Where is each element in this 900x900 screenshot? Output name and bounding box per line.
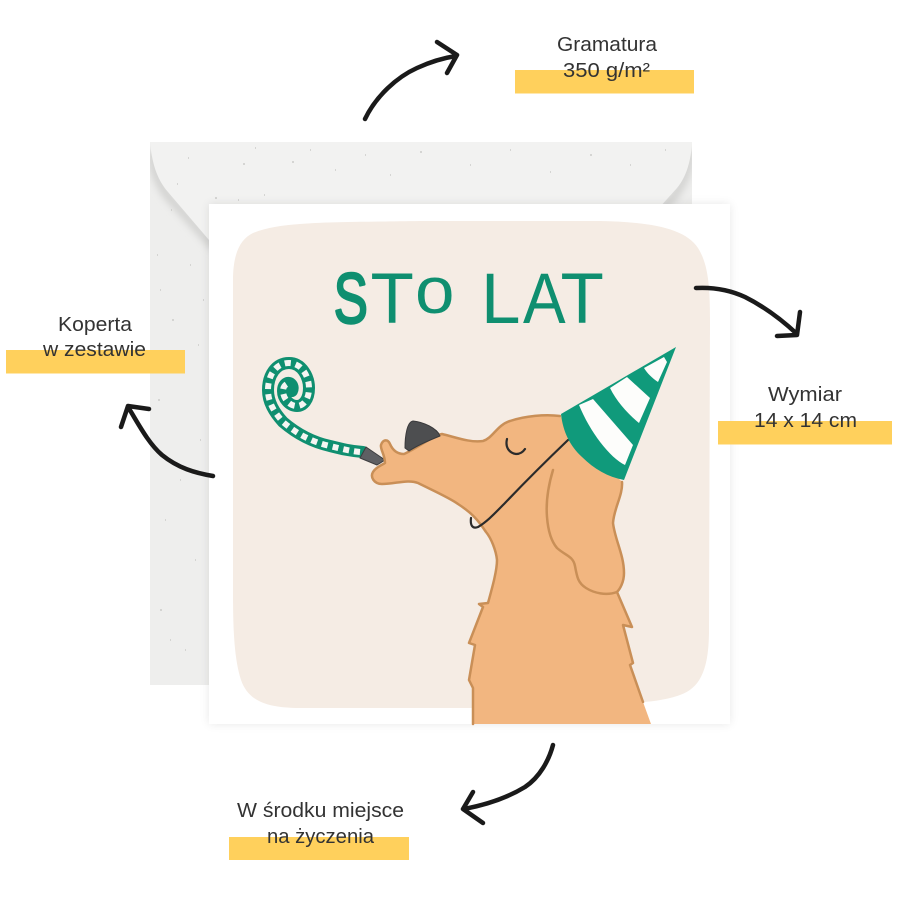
party hat: [561, 347, 676, 480]
party blower: [268, 363, 385, 465]
card title: S: [334, 260, 368, 339]
hat string: [471, 440, 568, 528]
arrow: to grammage label: [365, 42, 457, 119]
label: envelope included: [6, 314, 185, 374]
label: size: Wymiar: [768, 384, 842, 406]
card title: [334, 253, 604, 339]
label: space for wishes inside: na życzenia: [267, 826, 375, 848]
label: grammage: Gramatura: [557, 34, 658, 56]
dog nose: [405, 421, 440, 451]
dog: [372, 347, 676, 724]
card title: L: [481, 260, 520, 339]
label: space for wishes inside: [229, 800, 409, 860]
card title: T: [560, 260, 604, 339]
dog ear: [547, 470, 617, 594]
blower mouthpiece: [360, 447, 385, 465]
label: grammage: 350 g/m²: [563, 60, 650, 82]
card title: T: [370, 260, 414, 339]
label: envelope included: w zestawie: [42, 339, 146, 361]
label: space for wishes inside: W środku miejsce: [237, 800, 404, 822]
card: [209, 204, 730, 724]
dog eye: [506, 439, 525, 454]
label: size: 14 x 14 cm: [754, 410, 857, 432]
arrow: to inside label: [463, 745, 553, 823]
card title: A: [523, 260, 566, 339]
card title: o: [415, 253, 454, 327]
envelope: [150, 142, 692, 685]
dog body: [372, 415, 651, 724]
label: size: [718, 384, 892, 444]
arrow: to envelope label: [121, 406, 213, 476]
label: envelope included: Koperta: [58, 314, 133, 336]
arrow: to size label: [696, 288, 800, 336]
label: grammage: [515, 34, 694, 94]
card background blob: [233, 221, 710, 708]
